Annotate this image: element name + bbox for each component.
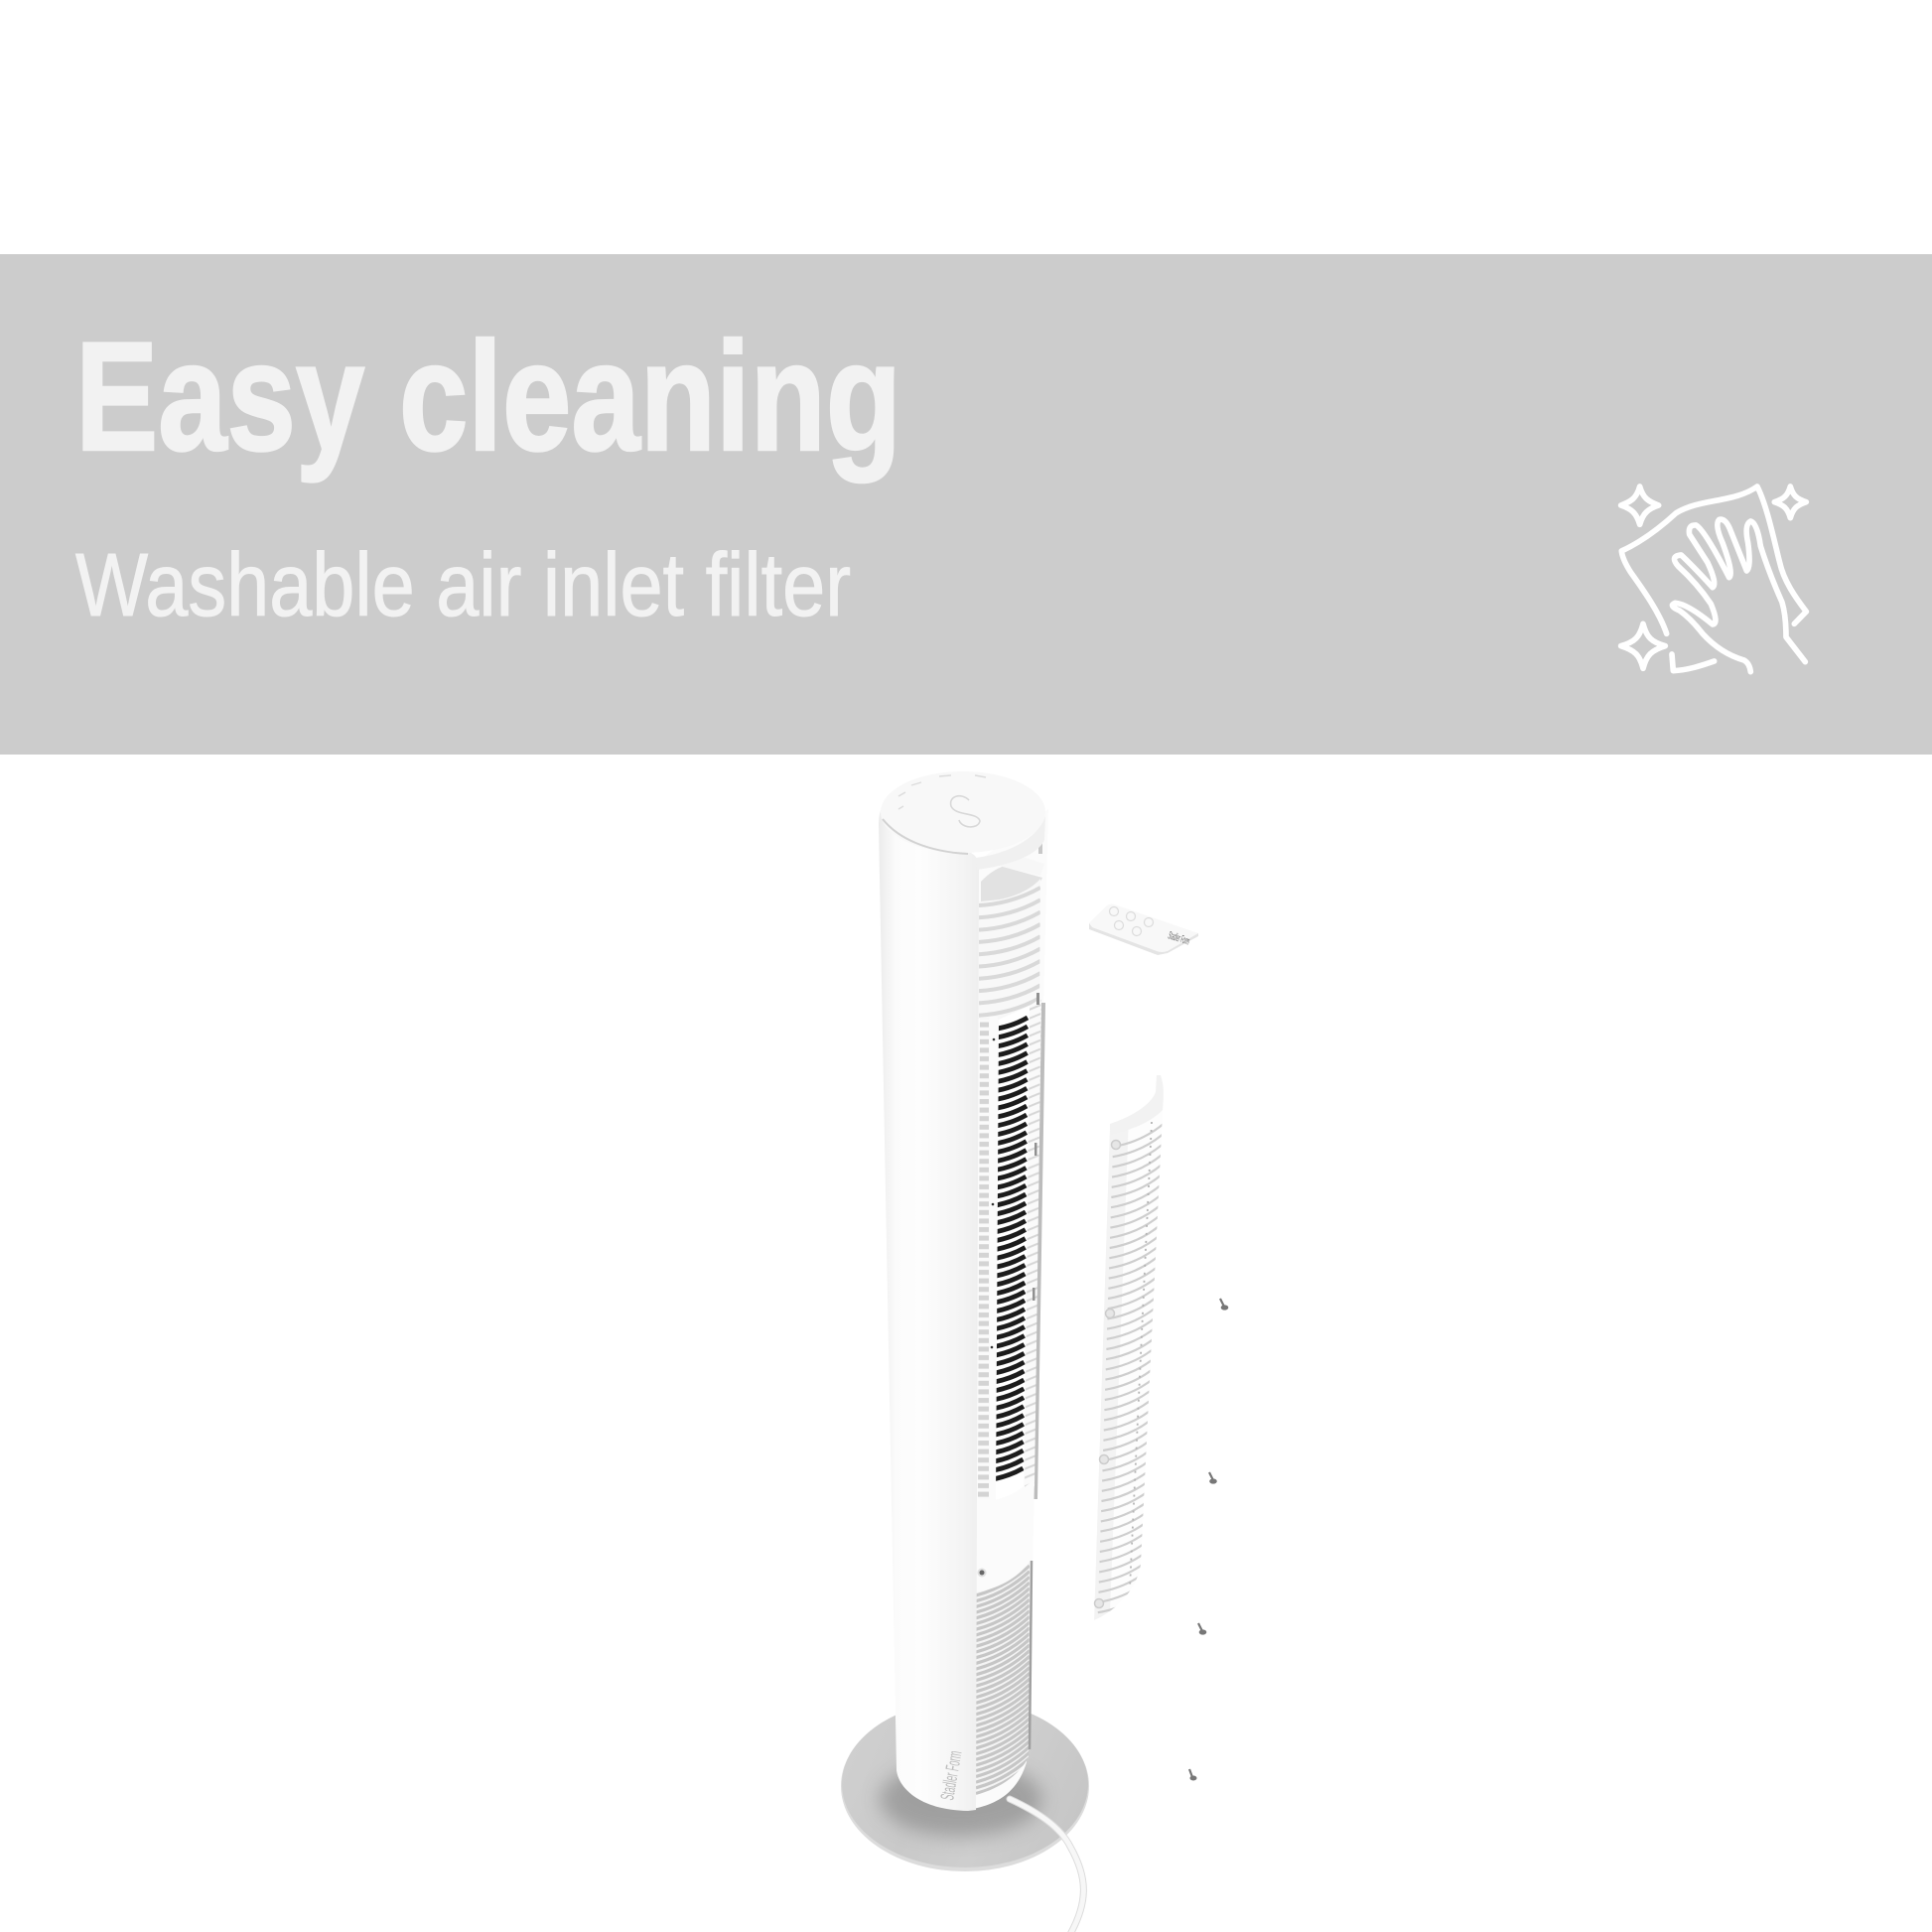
cloth lower corner bbox=[1672, 654, 1715, 671]
dark grille slats bbox=[996, 1009, 1030, 1481]
screws bbox=[1189, 1299, 1228, 1781]
right edge rail bbox=[1035, 1003, 1043, 1499]
middle white collar bbox=[976, 1479, 1035, 1592]
lower side edge bbox=[1030, 1561, 1032, 1749]
removable air inlet filter bbox=[1094, 1075, 1164, 1620]
text: Stadler Form bbox=[1167, 929, 1191, 948]
outer shell bbox=[879, 802, 979, 1811]
inner core bbox=[976, 844, 1045, 1809]
screw 1 bbox=[1220, 1299, 1228, 1311]
sparkle top left bbox=[1621, 486, 1659, 524]
left tick strip bbox=[978, 1019, 990, 1499]
filter top rim bbox=[1110, 1075, 1164, 1135]
outer shell: Stadler Form bbox=[937, 1749, 967, 1802]
filter dotted rail bbox=[1130, 1122, 1152, 1588]
remote control bbox=[1089, 904, 1198, 955]
upper ribs bbox=[979, 879, 1040, 1018]
cavity top bbox=[981, 867, 1042, 901]
sparkle bottom left bbox=[1621, 623, 1665, 668]
lower ribs bbox=[976, 1565, 1030, 1795]
header band bbox=[0, 254, 1932, 755]
tower fan illustration bbox=[841, 771, 1089, 1932]
sparkle top right bbox=[1774, 486, 1806, 518]
core body bbox=[968, 809, 1048, 1810]
remote buttons bbox=[1110, 907, 1154, 935]
icon: hand wiping with cloth and sparkles bbox=[1621, 486, 1806, 672]
screw 2 bbox=[1209, 1472, 1217, 1484]
remote edge bbox=[1089, 923, 1198, 955]
screw 3 bbox=[1198, 1623, 1206, 1635]
side clips bbox=[1033, 993, 1039, 1301]
title: Easy cleaning bbox=[75, 311, 901, 483]
filter panel bbox=[1094, 1124, 1162, 1620]
cap side wall bbox=[976, 816, 1045, 870]
logo on cap bbox=[951, 796, 980, 827]
filter screw holes bbox=[1094, 1140, 1120, 1608]
collar screw hole bbox=[977, 1569, 987, 1577]
power cord bbox=[1010, 1799, 1083, 1932]
cap control marks bbox=[898, 775, 986, 809]
cap crease bbox=[883, 819, 968, 854]
cavity bracket bbox=[1038, 840, 1042, 854]
side slats strip bbox=[1025, 998, 1041, 1492]
cloth outline bbox=[1621, 486, 1806, 633]
base plate bbox=[841, 1701, 1089, 1871]
white strip bbox=[990, 1017, 998, 1503]
hand bbox=[1672, 519, 1805, 672]
grille dots bbox=[991, 1038, 995, 1348]
screw 4 bbox=[1189, 1769, 1197, 1781]
top control cap bbox=[881, 771, 1045, 870]
remote face bbox=[1089, 904, 1198, 952]
cap face bbox=[881, 771, 1045, 853]
subtitle: Washable air inlet filter bbox=[75, 536, 851, 635]
